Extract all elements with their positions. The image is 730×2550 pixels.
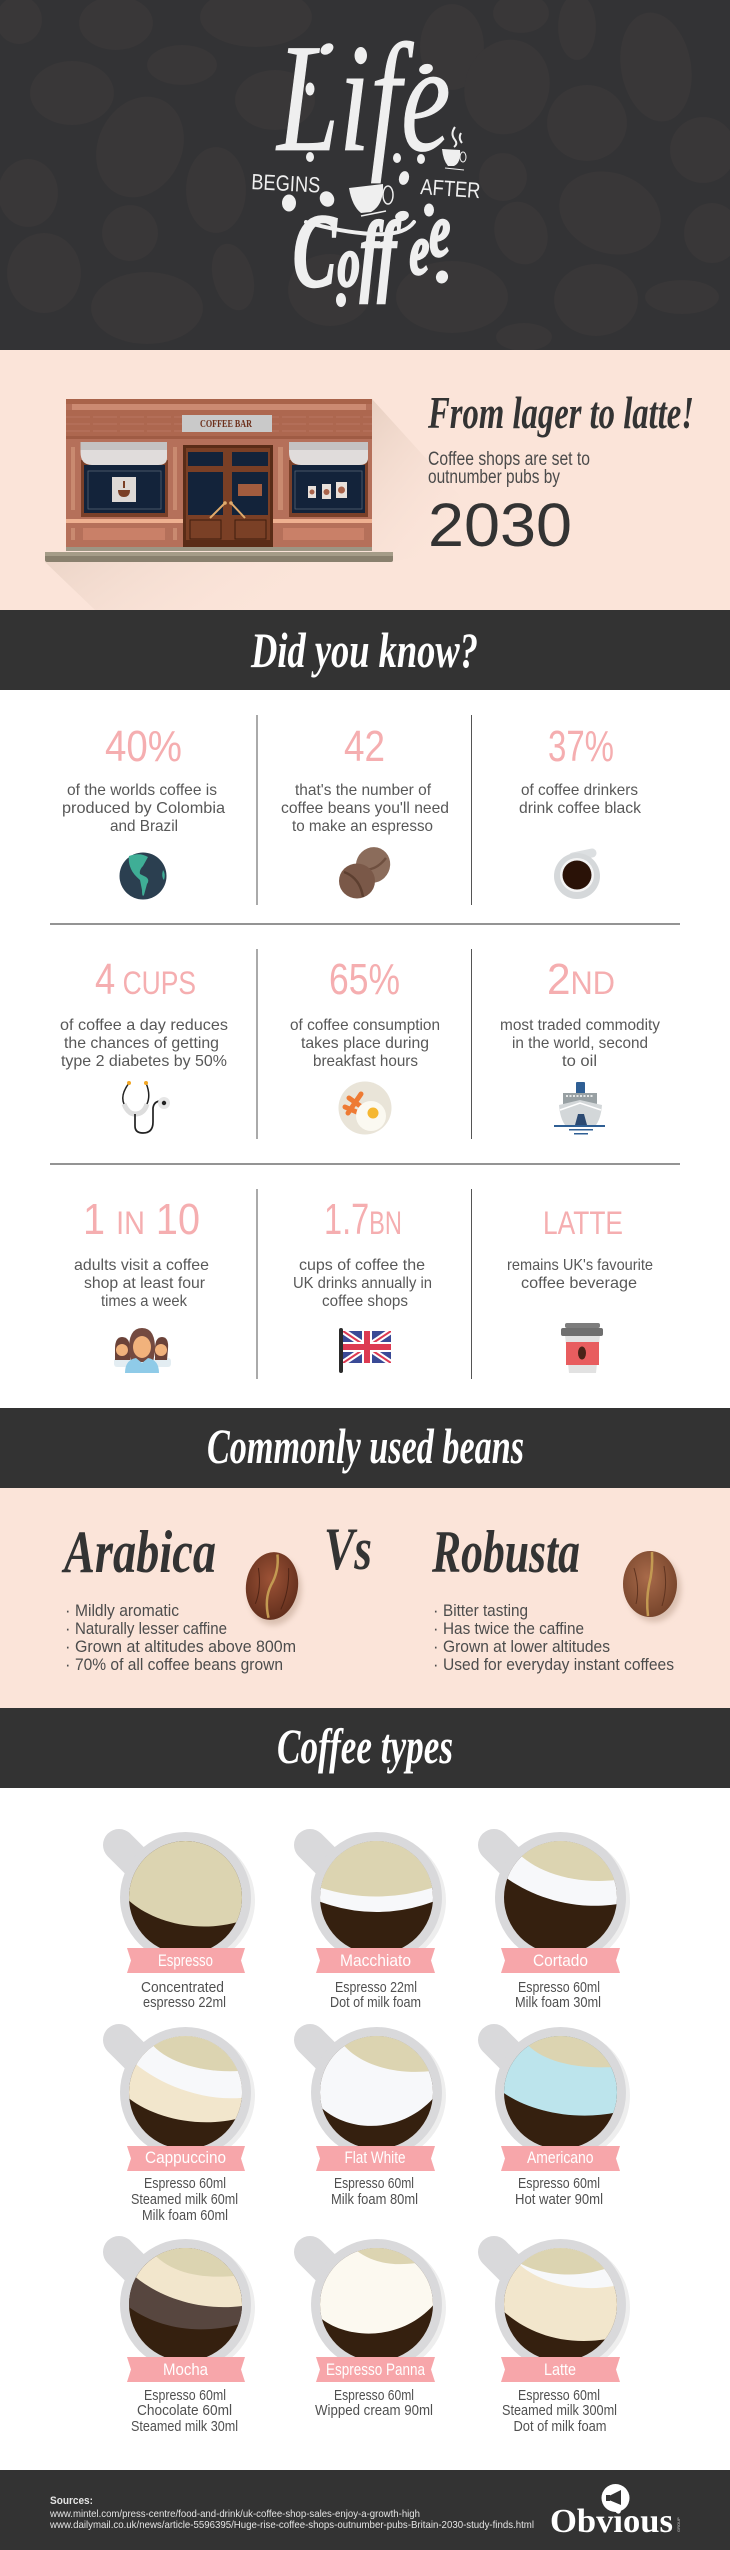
recipe: Steamed milk 60ml bbox=[131, 2191, 238, 2208]
text: coffee shops are set to outnumber pubs by bbox=[428, 449, 590, 488]
icon: small cup with steam bbox=[442, 127, 466, 170]
lettering: Coffee: e bbox=[429, 189, 450, 273]
recipe bbox=[331, 2175, 418, 2208]
stat: 4 cups: 4 CUPS bbox=[95, 955, 196, 1004]
list: robusta facts: Grown at lower altitudes bbox=[443, 1638, 610, 1656]
recipe: Dot of milk foam bbox=[330, 1994, 421, 2011]
door bbox=[183, 445, 273, 547]
text: coffee shops are set to outnumber pubs by: outnumber pubs by bbox=[428, 467, 560, 488]
ribbon bbox=[501, 2146, 620, 2171]
recipe: Steamed milk 30ml bbox=[131, 2418, 238, 2435]
band: commonly used beans: Commonly used beans bbox=[207, 1418, 524, 1474]
list: arabica facts: · bbox=[65, 1602, 70, 1620]
stat: 42 bbox=[281, 722, 449, 898]
stat: 1.7bn: 1.7BN bbox=[324, 1195, 402, 1244]
recipe bbox=[131, 2387, 238, 2435]
stat: 1 in 10: times a week bbox=[101, 1293, 188, 1310]
sources: www.mintel.com/press-centre/food-and-drink/uk-coffee-shop-sales-enjoy-a-growth-high bbox=[49, 2508, 420, 2520]
ribbon bbox=[316, 2146, 435, 2171]
list: arabica facts: · bbox=[65, 1620, 70, 1638]
ribbon: Cortado bbox=[533, 1951, 588, 1970]
icon: union flag bbox=[339, 1328, 391, 1373]
cup diagram bbox=[310, 1832, 446, 1966]
stat: latte bbox=[507, 1205, 653, 1373]
recipe bbox=[515, 1979, 601, 2011]
stat: 1.7bn: coffee shops bbox=[322, 1293, 408, 1310]
lettering: Coffee: e bbox=[410, 210, 429, 290]
stat: 40%: 40% bbox=[105, 722, 182, 771]
lettering: Coffee: C bbox=[293, 192, 338, 309]
stat: 2nd: most traded commodity bbox=[500, 1017, 660, 1034]
stat: 37%: 37% bbox=[548, 722, 614, 771]
sources: Sources: bbox=[50, 2495, 93, 2507]
lettering: Life: Life bbox=[275, 13, 451, 184]
sources: www.dailymail.co.uk/news/article-5596395/Huge-rise-coffee-shops-outnumber-pubs-Britain-2030-study-finds.html bbox=[49, 2519, 534, 2531]
icon: coffee cup bbox=[349, 184, 393, 216]
list: robusta facts: · bbox=[433, 1638, 438, 1656]
recipe bbox=[315, 2387, 433, 2419]
recipe: Milk foam 30ml bbox=[515, 1994, 601, 2011]
ribbon: Americano bbox=[527, 2148, 594, 2167]
lettering: begins: BEGINS bbox=[251, 169, 321, 198]
ribbon bbox=[316, 2357, 435, 2382]
recipe: Espresso 60ml bbox=[518, 1979, 600, 1996]
coffee: flat white bbox=[310, 2027, 446, 2208]
list: robusta facts: Used for everyday instant coffees bbox=[443, 1656, 674, 1674]
sign: coffee bar: COFFEE BAR bbox=[200, 418, 253, 430]
coffee: cappuccino bbox=[119, 2027, 255, 2224]
band: coffee types bbox=[0, 1708, 730, 1788]
recipe bbox=[330, 1979, 421, 2011]
stat: 40%: produced by Colombia bbox=[62, 800, 225, 817]
header panel bbox=[0, 0, 730, 351]
stat: 42: coffee beans you'll need bbox=[281, 800, 449, 817]
panel: from lager to latte bbox=[0, 350, 730, 610]
pavement bbox=[45, 552, 393, 562]
coffee: americano bbox=[494, 2027, 630, 2208]
list: arabica facts: · bbox=[65, 1638, 70, 1656]
recipe: Espresso 60ml bbox=[518, 2387, 600, 2404]
stat: 42: 42 bbox=[344, 722, 385, 771]
list: arabica facts: Grown at altitudes above 800m bbox=[75, 1638, 296, 1656]
recipe bbox=[131, 2175, 238, 2224]
ribbon bbox=[127, 2146, 245, 2171]
list: arabica facts bbox=[65, 1602, 296, 1674]
stat: latte: LATTE bbox=[543, 1205, 623, 1241]
list: robusta facts: · bbox=[433, 1620, 438, 1638]
list: robusta facts: Has twice the caffine bbox=[443, 1620, 584, 1638]
list: arabica facts: · bbox=[65, 1656, 70, 1674]
ribbon bbox=[501, 2357, 620, 2382]
cup diagram bbox=[119, 2239, 255, 2373]
coffee: espresso panna bbox=[310, 2239, 446, 2419]
band: coffee types: Coffee types bbox=[277, 1718, 453, 1774]
cup diagram bbox=[310, 2027, 446, 2161]
logo: obvious group: GROUP bbox=[676, 2517, 681, 2532]
recipe: Espresso 60ml bbox=[334, 2387, 414, 2404]
recipe: Milk foam 60ml bbox=[142, 2207, 228, 2224]
stat: 4 cups: the chances of getting bbox=[64, 1035, 219, 1052]
cup diagram bbox=[494, 1832, 630, 1966]
list: arabica facts: 70% of all coffee beans grown bbox=[75, 1656, 283, 1674]
icon: ship bbox=[554, 1082, 605, 1134]
stat: 1.7bn: UK drinks annually in bbox=[293, 1275, 432, 1292]
stat: latte: remains UK's favourite bbox=[507, 1257, 653, 1274]
photo: robusta bean bbox=[623, 1551, 681, 1622]
icon: coffee beans bbox=[339, 842, 396, 898]
ribbon bbox=[316, 1948, 435, 1973]
recipe: Wipped cream 90ml bbox=[315, 2402, 433, 2419]
left window bbox=[81, 460, 168, 517]
recipe: Espresso 22ml bbox=[335, 1979, 417, 1996]
heading: robusta: Robusta bbox=[431, 1519, 580, 1585]
stat: 65%: breakfast hours bbox=[313, 1053, 418, 1070]
ribbon: Mocha bbox=[163, 2360, 208, 2379]
left awning bbox=[80, 442, 167, 465]
stat: 4 cups bbox=[60, 955, 228, 1133]
panel: arabica vs robusta bbox=[0, 1488, 730, 1708]
stat: 65%: of coffee consumption bbox=[290, 1017, 440, 1034]
stat: 1.7bn: cups of coffee the bbox=[299, 1257, 425, 1274]
recipe: Espresso 60ml bbox=[334, 2175, 414, 2192]
right awning bbox=[289, 442, 368, 465]
stat: 37%: drink coffee black bbox=[519, 800, 642, 817]
cup diagram bbox=[119, 1832, 255, 1966]
stat: 37% bbox=[519, 722, 642, 899]
list: arabica facts: Naturally lesser caffine bbox=[75, 1620, 227, 1638]
stat: 40%: of the worlds coffee is bbox=[67, 782, 217, 799]
coffee: latte bbox=[494, 2239, 630, 2435]
recipe: Dot of milk foam bbox=[514, 2418, 606, 2435]
stat: latte: coffee beverage bbox=[521, 1275, 637, 1292]
ribbon bbox=[127, 2357, 245, 2382]
recipe: Steamed milk 300ml bbox=[502, 2402, 617, 2419]
lettering: Coffee: o bbox=[338, 222, 360, 302]
stat: 1 in 10 bbox=[74, 1195, 209, 1373]
recipe: Espresso 60ml bbox=[144, 2387, 226, 2404]
icon: globe bbox=[120, 852, 166, 900]
band: commonly used beans bbox=[0, 1408, 730, 1488]
stat: 65%: takes place during bbox=[301, 1035, 429, 1052]
illustration: coffee bar shopfront bbox=[45, 399, 393, 562]
icons: scattered beans bbox=[282, 41, 450, 307]
sources bbox=[49, 2495, 534, 2531]
cup diagram bbox=[119, 2027, 255, 2161]
ribbon: Espresso bbox=[158, 1951, 213, 1970]
right window bbox=[289, 460, 368, 517]
ribbon bbox=[501, 1948, 620, 1973]
icon: black coffee cup bbox=[554, 853, 600, 899]
lettering: Coffee: ff bbox=[360, 205, 401, 304]
band: did you know bbox=[0, 610, 730, 690]
stat: 1.7bn bbox=[293, 1195, 432, 1373]
stat: 2nd: to oil bbox=[562, 1053, 597, 1070]
ribbon: Cappuccino bbox=[145, 2148, 226, 2167]
icon: stethoscope bbox=[123, 1081, 170, 1133]
icon: takeaway cup bbox=[561, 1323, 603, 1373]
footer bbox=[0, 2470, 730, 2550]
recipe bbox=[515, 2175, 603, 2208]
list: arabica facts: Mildly aromatic bbox=[75, 1602, 179, 1620]
logo: obvious group: Obvious bbox=[550, 2503, 673, 2540]
ribbon: Espresso Panna bbox=[326, 2360, 425, 2379]
stat: 1 in 10: 1 IN 10 bbox=[83, 1195, 200, 1244]
coffee: macchiato bbox=[310, 1832, 446, 2011]
recipe bbox=[502, 2387, 617, 2435]
cup diagram bbox=[310, 2239, 446, 2373]
list: robusta facts: · bbox=[433, 1602, 438, 1620]
stat: 42: that's the number of bbox=[295, 782, 432, 799]
number: 2030: 2030 bbox=[428, 491, 572, 559]
recipe bbox=[141, 1979, 226, 2011]
recipe: Espresso 60ml bbox=[144, 2175, 226, 2192]
ribbon: Macchiato bbox=[340, 1951, 411, 1970]
heading: vs: Vs bbox=[324, 1516, 372, 1582]
icon: people bbox=[114, 1328, 171, 1373]
cup diagram bbox=[494, 2027, 630, 2161]
recipe: Hot water 90ml bbox=[515, 2191, 603, 2208]
list: robusta facts: · bbox=[433, 1656, 438, 1674]
stat: 4 cups: type 2 diabetes by 50% bbox=[61, 1053, 227, 1070]
stat: 1 in 10: shop at least four bbox=[84, 1275, 206, 1292]
stat: 65% bbox=[290, 955, 440, 1134]
stat: 40%: and Brazil bbox=[110, 818, 178, 835]
list: robusta facts: Bitter tasting bbox=[443, 1602, 528, 1620]
recipe: Chocolate 60ml bbox=[137, 2402, 232, 2419]
lettering: after: AFTER bbox=[420, 174, 481, 203]
coffee: cortado bbox=[494, 1832, 630, 2011]
recipe: Espresso 60ml bbox=[518, 2175, 600, 2192]
heading: arabica: Arabica bbox=[61, 1519, 216, 1585]
icon: breakfast plate bbox=[338, 1082, 392, 1134]
ribbon bbox=[127, 1948, 245, 1973]
sign: coffee bar bbox=[182, 415, 272, 432]
coffee: espresso bbox=[119, 1832, 255, 2011]
stat: 2nd: in the world, second bbox=[512, 1035, 648, 1052]
ribbon: Latte bbox=[544, 2360, 576, 2379]
logo: life begins after coffee bbox=[251, 13, 481, 309]
stat: 1 in 10: adults visit a coffee bbox=[74, 1257, 209, 1274]
recipe: Milk foam 80ml bbox=[331, 2191, 418, 2208]
grid lines bbox=[50, 715, 680, 1379]
band: did you know: Did you know? bbox=[250, 622, 478, 678]
text: coffee shops are set to outnumber pubs by: Coffee shops are set to bbox=[428, 449, 590, 470]
photo: arabica bean bbox=[241, 1549, 306, 1629]
logo: obvious group bbox=[550, 2484, 681, 2540]
cup diagram bbox=[494, 2239, 630, 2373]
recipe: Concentrated bbox=[141, 1979, 224, 1996]
list: robusta facts bbox=[433, 1602, 674, 1674]
stat: 42: to make an espresso bbox=[292, 818, 433, 835]
coffee: mocha bbox=[119, 2239, 255, 2435]
ribbon: Flat White bbox=[344, 2148, 406, 2167]
stat: 2nd bbox=[500, 955, 660, 1134]
recipe: espresso 22ml bbox=[143, 1994, 226, 2011]
stat: 4 cups: of coffee a day reduces bbox=[60, 1017, 228, 1034]
stat: 40% bbox=[62, 722, 225, 900]
stat: 37%: of coffee drinkers bbox=[521, 782, 638, 799]
stat: 65%: 65% bbox=[329, 955, 400, 1004]
stat: 2nd: 2ND bbox=[547, 955, 615, 1004]
